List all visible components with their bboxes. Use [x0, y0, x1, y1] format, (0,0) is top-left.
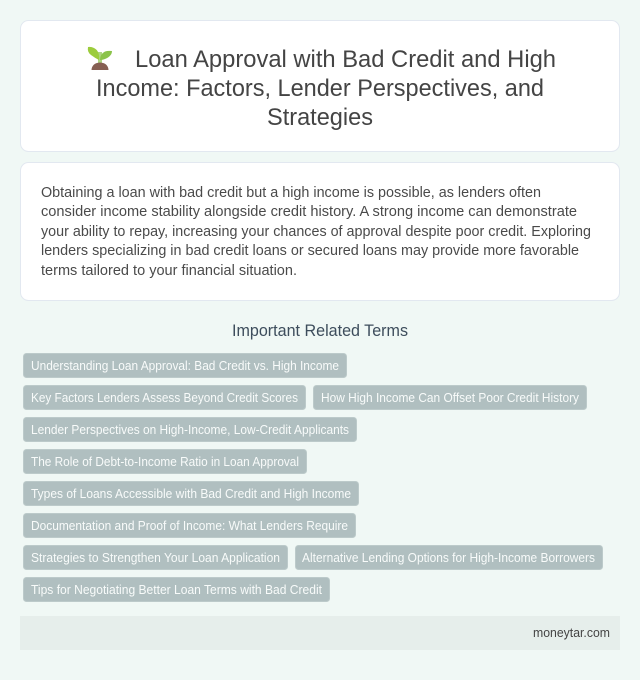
text block: introduction paragraph: your ability to repay, increasing your chances of approval despite poor credit. Exploring — [41, 224, 591, 240]
text block: introduction paragraph: consider income stability alongside credit history. A strong income can demonstrate — [41, 204, 577, 220]
heading: title: Income: Factors, Lender Perspectives, and — [96, 75, 544, 102]
panel: title card — [20, 20, 620, 152]
footer — [20, 616, 620, 650]
tag: lender perspectives: Lender Perspectives on High-Income, Low-Credit Applicants — [31, 423, 349, 437]
tag: understanding loan approval — [24, 354, 346, 378]
tag: debt-to-income ratio: The Role of Debt-to-Income Ratio in Loan Approval — [31, 455, 299, 469]
tag: key factors — [24, 386, 306, 410]
panel: related term tags — [24, 354, 602, 602]
tag: high income offset — [314, 386, 586, 410]
tag: lender perspectives — [24, 418, 356, 442]
tag: negotiating tips — [24, 578, 330, 602]
icon: seedling — [88, 47, 112, 70]
tag: types of loans — [24, 482, 358, 506]
tag: understanding loan approval: Understanding Loan Approval: Bad Credit vs. High Income — [31, 359, 339, 373]
tag: alternative lending: Alternative Lending Options for High-Income Borrowers — [302, 551, 595, 565]
text block: introduction paragraph: lenders specializing in bad credit loans or secured loans may provide more favorable — [41, 243, 579, 259]
heading: title — [96, 46, 556, 131]
heading: title: Loan Approval with Bad Credit and High — [135, 46, 556, 73]
text block: introduction paragraph — [41, 185, 591, 279]
footer: moneytar.com — [533, 626, 610, 640]
tag: negotiating tips: Tips for Negotiating Better Loan Terms with Bad Credit — [31, 583, 322, 597]
text block: introduction paragraph: Obtaining a loan with bad credit but a high income is possible, as lenders often — [41, 185, 541, 201]
panel: introduction — [20, 162, 620, 300]
tag: key factors: Key Factors Lenders Assess Beyond Credit Scores — [31, 391, 298, 405]
tag: high income offset: How High Income Can Offset Poor Credit History — [321, 391, 580, 405]
tag: documentation — [24, 514, 356, 538]
tag: strategies: Strategies to Strengthen Your Loan Application — [31, 551, 280, 565]
tag: documentation: Documentation and Proof of Income: What Lenders Require — [31, 519, 348, 533]
heading: important related terms: Important Related Terms — [232, 322, 408, 340]
text block: introduction paragraph: terms tailored to your financial situation. — [41, 263, 297, 279]
tag: strategies — [24, 546, 288, 570]
tag: debt-to-income ratio — [24, 450, 306, 474]
tag: types of loans: Types of Loans Accessible with Bad Credit and High Income — [31, 487, 351, 501]
heading: title: Strategies — [267, 104, 373, 131]
tag: alternative lending — [296, 546, 602, 570]
